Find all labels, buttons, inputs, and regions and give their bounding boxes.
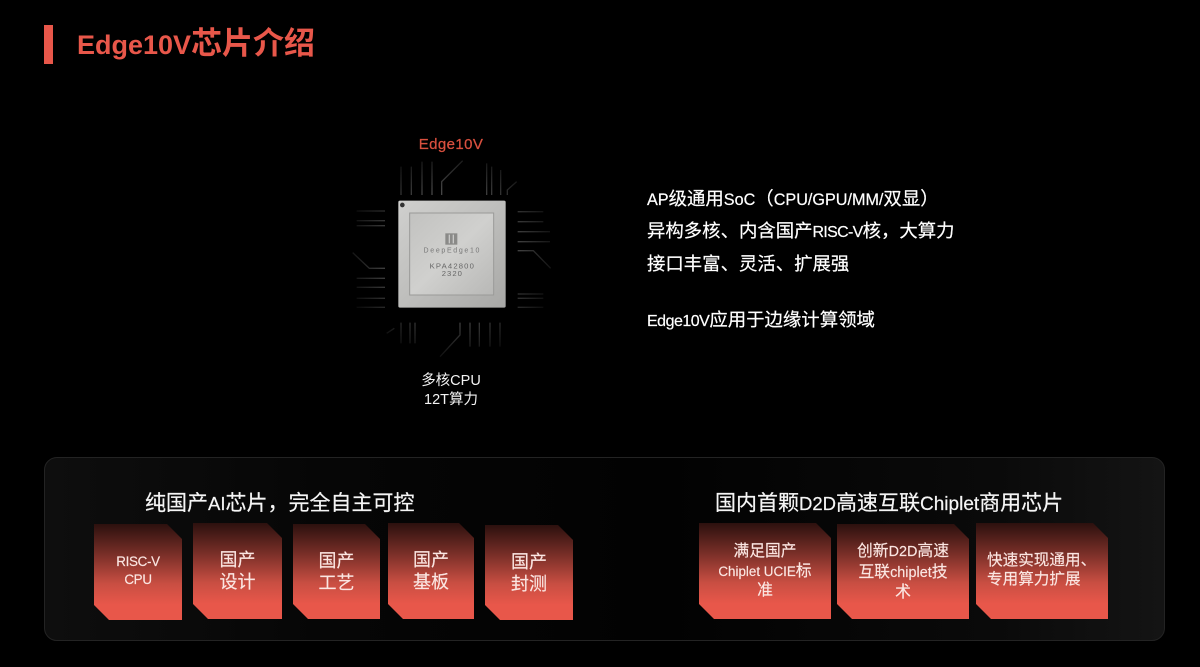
chip caption: 多核CPU xyxy=(421,373,481,389)
card: 国产设计: 设计 xyxy=(220,572,256,592)
card: 国产封测: 国产 xyxy=(511,552,547,572)
card: RISC-V CPU: RISC-V xyxy=(116,554,160,569)
card: 国产基板: 国产 xyxy=(413,550,449,570)
chip caption xyxy=(421,372,481,408)
heading: first D2D chiplet chip: 国内首颗D2D高速互联Chiplet商用芯片 xyxy=(715,492,1063,515)
feature line 3: 接口丰富、灵活、扩展强 xyxy=(647,253,849,274)
card: 国产工艺: 工艺 xyxy=(318,573,354,593)
card group: chiplet xyxy=(699,523,1108,619)
card: RISC-V CPU: CPU xyxy=(124,572,152,587)
title accent bar xyxy=(44,25,53,64)
card: D2D interconnect: 术 xyxy=(895,584,911,601)
chip body: DeepEdge10 xyxy=(424,247,481,254)
card: compute expansion xyxy=(976,523,1108,619)
card: D2D interconnect xyxy=(837,524,969,619)
circuit traces xyxy=(353,161,551,357)
feature line 4: Edge10V应用于边缘计算领域 xyxy=(647,309,875,330)
chip body xyxy=(398,201,506,308)
feature line 1: AP级通用SoC（CPU/GPU/MM/双显） xyxy=(647,188,939,209)
chip body: KPA42800 xyxy=(430,262,475,271)
chip body: 2320 xyxy=(442,269,463,278)
feature line 2: 异构多核、内含国产RISC-V核，大算力 xyxy=(647,220,955,241)
card: UCIE standard: 准 xyxy=(757,582,773,599)
title: Edge10V芯片介绍 xyxy=(77,26,315,61)
card: 国产封测: 封测 xyxy=(511,574,547,594)
card: RISC-V CPU xyxy=(94,524,182,620)
card group: domestic xyxy=(94,523,573,620)
chip caption: 12T算力 xyxy=(424,392,478,408)
card: compute expansion: 快速实现通用、 xyxy=(987,552,1096,569)
card: D2D interconnect: 创新D2D高速 xyxy=(857,543,949,560)
card: 国产基板 xyxy=(388,523,474,619)
card: 国产工艺 xyxy=(293,524,380,619)
card: UCIE standard: 满足国产 xyxy=(733,543,797,560)
card: 国产设计: 国产 xyxy=(220,550,256,570)
card: 国产设计 xyxy=(193,523,282,619)
card: 国产工艺: 国产 xyxy=(318,551,354,571)
feature list xyxy=(646,188,955,330)
heading: domestic AI chip: 纯国产AI芯片，完全自主可控 xyxy=(145,492,414,515)
card: D2D interconnect: 互联chiplet技 xyxy=(858,564,948,580)
card: 国产基板: 基板 xyxy=(413,572,449,592)
chip label: Edge10V xyxy=(419,136,483,153)
bottom panel xyxy=(44,457,1165,641)
card: UCIE standard xyxy=(699,523,831,619)
card: UCIE standard: Chiplet UCIE标 xyxy=(718,562,812,580)
card: compute expansion: 专用算力扩展 xyxy=(987,570,1081,588)
card: 国产封测 xyxy=(485,525,573,620)
chip illustration xyxy=(352,160,551,357)
